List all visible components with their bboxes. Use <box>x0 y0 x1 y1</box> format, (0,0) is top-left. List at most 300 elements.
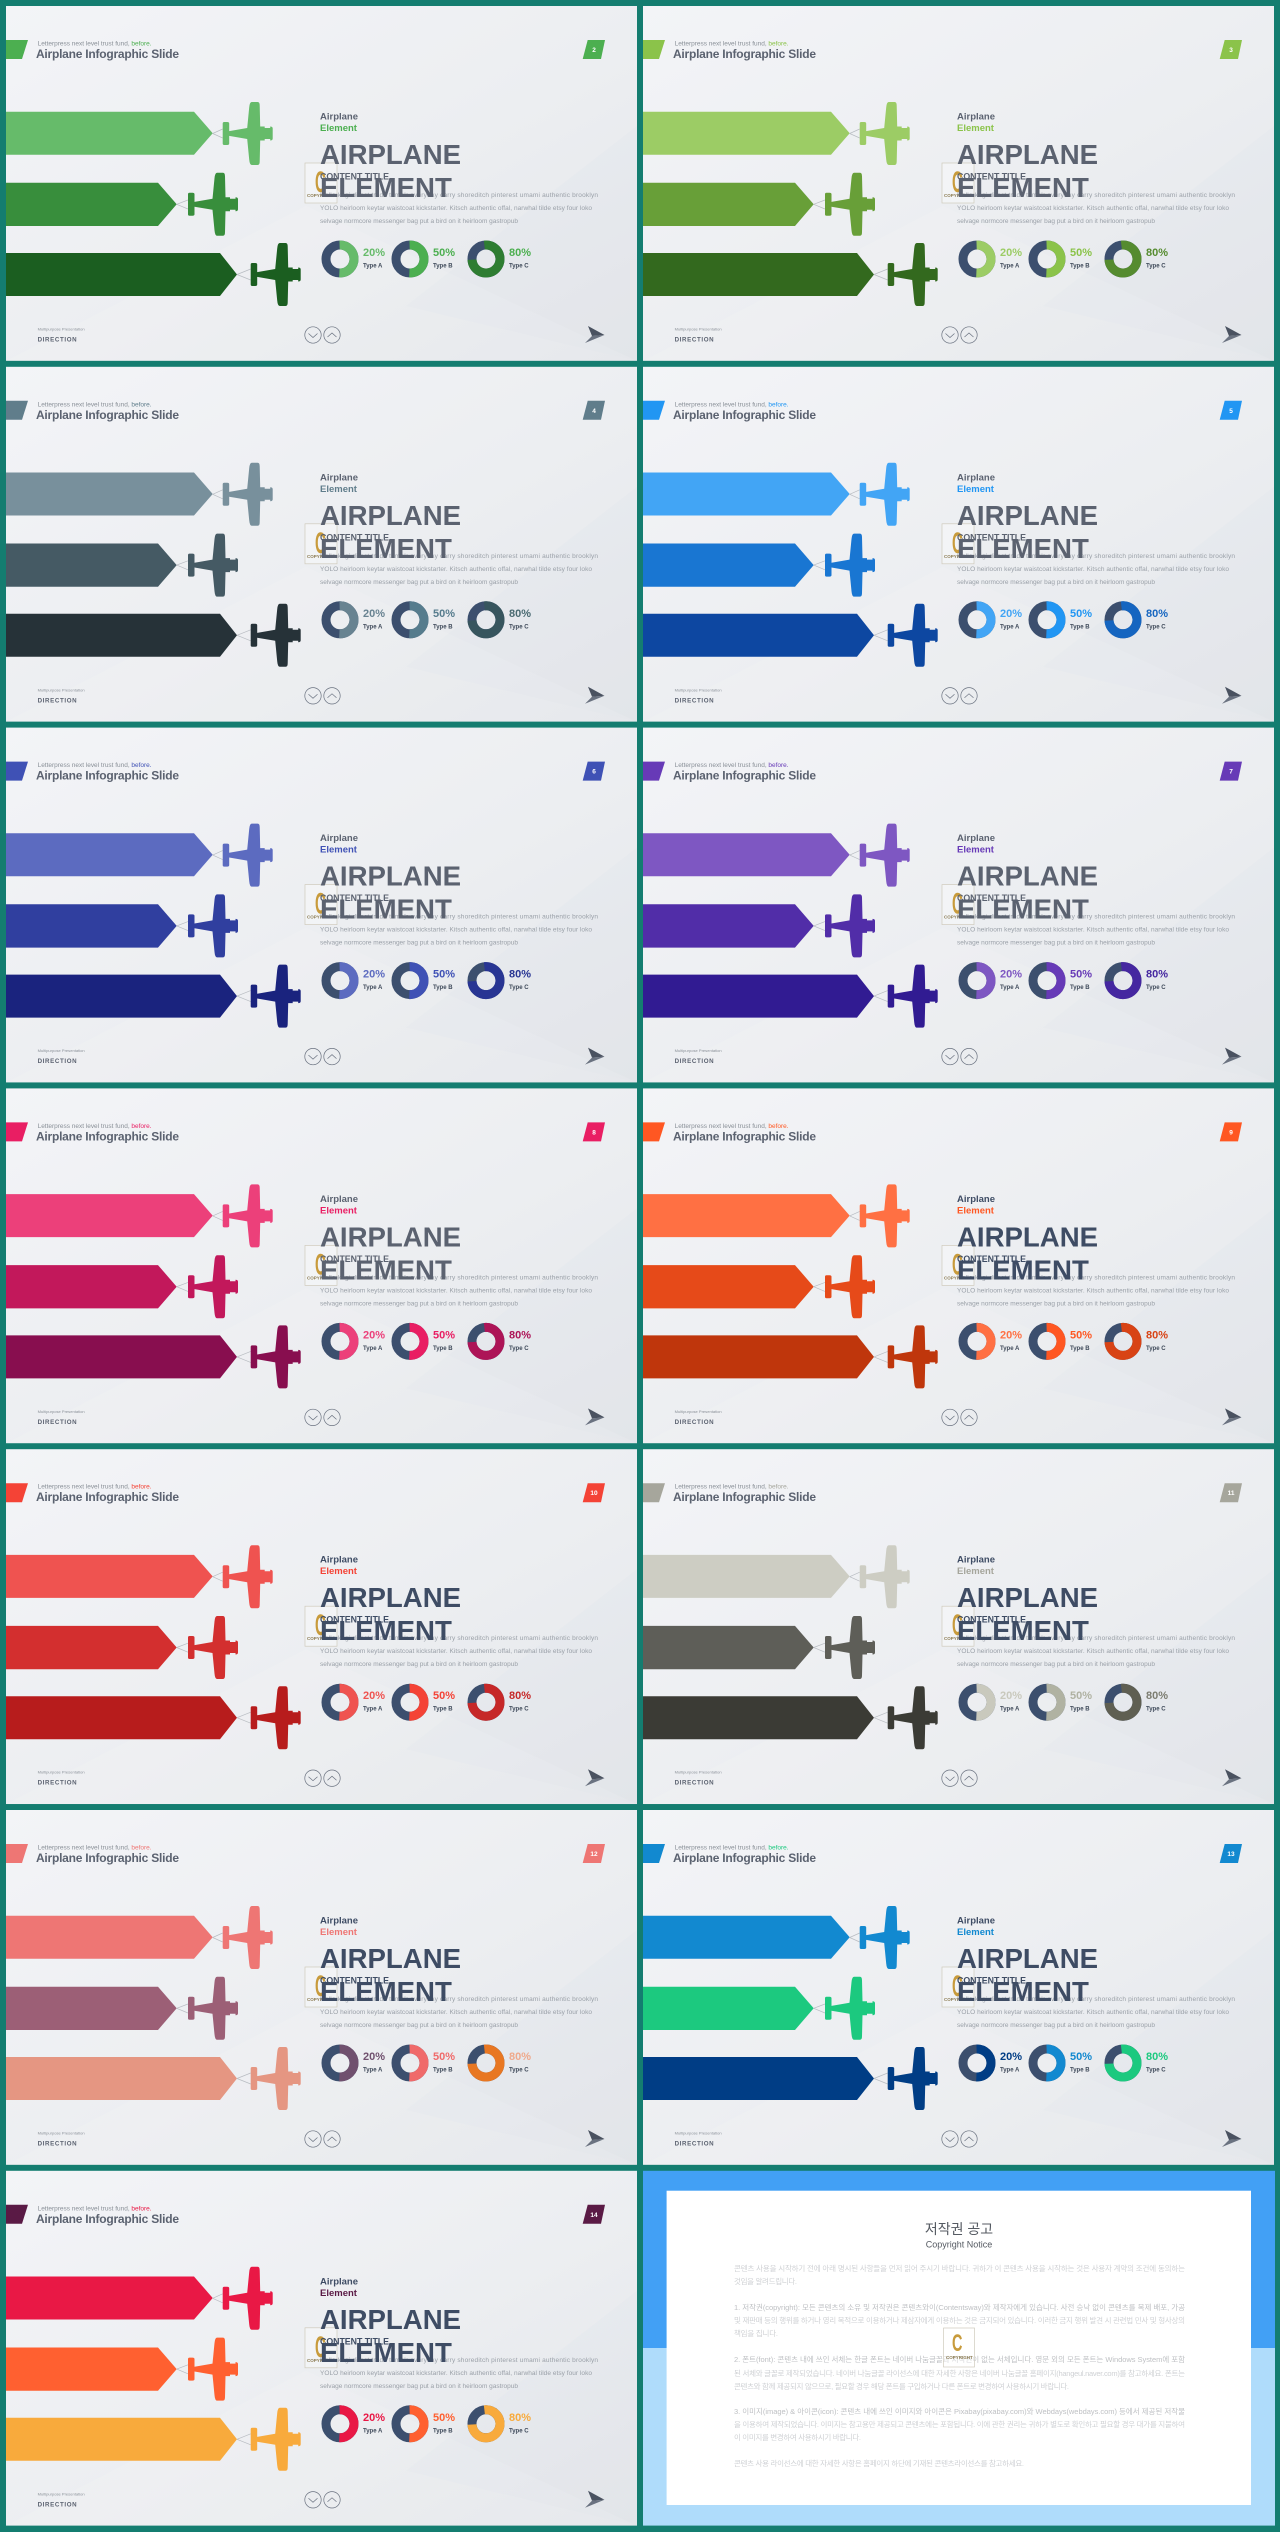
watermark logo: C <box>952 888 963 921</box>
airplane 1 <box>213 824 273 887</box>
body text: YOLO heirloom keytar waistcoat kickstarter. Kitsch authentic offal, narwhal tilde etsy four loko <box>957 566 1229 573</box>
donut type A <box>326 2410 385 2438</box>
header caption: Letterpress next level trust fund, before. <box>38 1123 152 1130</box>
label: airplane element: Airplane <box>957 833 995 844</box>
large heading: AIRPLANE <box>320 1221 461 1252</box>
page number badge <box>1220 401 1242 420</box>
footer text <box>38 1409 85 1426</box>
airplane 3 <box>237 1686 301 1749</box>
label: airplane element: Element <box>320 2288 358 2299</box>
content title: CONTENT TITLE <box>320 172 389 182</box>
notice body text: 것임을 알려드립니다. <box>734 2276 797 2286</box>
body text: selvage normcore messenger bag put a bird on it heirloom gastropub <box>957 1300 1155 1307</box>
arrow bar 3 <box>6 1696 237 1739</box>
page number badge <box>1220 1122 1242 1141</box>
airplane 2 <box>814 1255 875 1318</box>
donut type A <box>326 606 385 634</box>
header title: Airplane Infographic Slide <box>673 1490 816 1504</box>
donut type C: Type C <box>509 624 529 630</box>
navigation arrows <box>942 688 977 704</box>
label: airplane element <box>320 2276 358 2299</box>
large heading <box>320 139 461 203</box>
large heading <box>957 1582 1098 1646</box>
header caption: Letterpress next level trust fund, before. <box>675 401 789 408</box>
page number badge: 14 <box>590 2212 598 2219</box>
footer text: DIRECTION <box>38 1419 77 1426</box>
footer text: Multipurpose Presentation <box>38 326 85 332</box>
notice body text <box>734 2263 1185 2468</box>
page number badge <box>1220 1844 1242 1863</box>
airplane 3 <box>237 604 301 667</box>
arrow bar 2 <box>6 1626 177 1669</box>
arrow bar 3 <box>6 253 237 296</box>
donut type A: 20% <box>1000 247 1022 259</box>
donut type A <box>963 967 1022 995</box>
donut type C: 80% <box>509 2412 531 2424</box>
content title: CONTENT TITLE <box>320 2336 389 2346</box>
slide 14: crimson, orange and amber <box>6 2171 637 2526</box>
airplane 3 <box>874 1686 938 1749</box>
slide 3: light green <box>643 6 1274 361</box>
donut type A: 20% <box>1000 1690 1022 1702</box>
arrow bar 2 <box>6 544 177 587</box>
body text: selvage normcore messenger bag put a bird on it heirloom gastropub <box>957 579 1155 586</box>
donut type B <box>1033 967 1092 995</box>
header caption: Letterpress next level trust fund, before. <box>38 1844 152 1852</box>
watermark logo: COPYRIGHT <box>944 193 971 198</box>
body text <box>320 1996 598 2029</box>
airplane 2 <box>814 1977 875 2040</box>
watermark logo <box>305 885 337 925</box>
header tab <box>643 1483 665 1502</box>
notice title: 저작권 공고 <box>925 2221 993 2237</box>
label: airplane element: Element <box>320 1205 358 1216</box>
arrow bar 2 <box>6 1265 177 1308</box>
donut type A: 20% <box>363 608 385 620</box>
footer text: DIRECTION <box>675 697 714 704</box>
footer text: Multipurpose Presentation <box>38 1409 85 1414</box>
arrow bar 1 <box>6 112 213 155</box>
slide 2: green <box>6 6 637 361</box>
donut type B: 50% <box>433 969 455 981</box>
body text: selvage normcore messenger bag put a bird on it heirloom gastropub <box>957 1661 1155 1668</box>
donut type C: Type C <box>509 1707 529 1713</box>
large heading <box>320 1221 461 1285</box>
donut type A: 20% <box>363 247 385 259</box>
airplane 3 <box>874 1325 938 1388</box>
footer text <box>675 2130 722 2148</box>
notice body text: 책임을 집니다. <box>734 2328 778 2338</box>
donut type B: Type B <box>433 2068 453 2074</box>
donut type C <box>1108 1326 1168 1357</box>
donut type A: Type A <box>363 264 383 270</box>
body text: Hella kogi direct trade tumblr everyday carry shoreditch pinterest umami authentic brooklyn <box>320 1635 598 1642</box>
panel: copyright notice slide <box>643 2171 1275 2526</box>
airplane 3 <box>237 2047 301 2110</box>
arrow bar 1 <box>6 1555 213 1598</box>
donut type B <box>1033 245 1092 273</box>
body text <box>320 553 598 586</box>
body text: selvage normcore messenger bag put a bird on it heirloom gastropub <box>320 579 518 586</box>
footer text <box>675 326 722 344</box>
footer text: Multipurpose Presentation <box>38 1770 85 1775</box>
arrow bar 1 <box>643 833 850 876</box>
arrow bar 2 <box>643 544 814 587</box>
large heading: AIRPLANE <box>320 2304 461 2335</box>
label: airplane element <box>320 1194 358 1216</box>
watermark logo: C <box>952 1971 963 2004</box>
donut type C: 80% <box>509 969 531 981</box>
donut type A <box>326 2049 385 2077</box>
watermark logo: C <box>315 1610 326 1643</box>
footer text <box>675 1770 722 1787</box>
body text <box>957 1274 1235 1307</box>
icon: paper plane <box>1222 1048 1242 1065</box>
watermark logo: C <box>952 2330 962 2357</box>
body text: Hella kogi direct trade tumblr everyday carry shoreditch pinterest umami authentic brooklyn <box>320 2357 598 2364</box>
donut type A: 20% <box>363 1329 385 1341</box>
body text: selvage normcore messenger bag put a bird on it heirloom gastropub <box>320 2022 518 2029</box>
header tab <box>6 401 28 420</box>
large heading: ELEMENT <box>957 172 1089 203</box>
content title: CONTENT TITLE <box>320 893 389 903</box>
content title: CONTENT TITLE <box>957 1254 1026 1264</box>
donut type A: Type A <box>1000 264 1020 270</box>
label: airplane element: Airplane <box>320 112 358 122</box>
donut type C <box>1108 605 1168 635</box>
watermark logo: C <box>315 528 326 560</box>
arrow bar 3 <box>6 2418 237 2461</box>
footer text: DIRECTION <box>38 1780 77 1787</box>
arrow bar 3 <box>6 614 237 657</box>
large heading <box>957 1221 1098 1285</box>
watermark logo <box>305 1606 337 1646</box>
airplane 2 <box>814 894 875 957</box>
body text: selvage normcore messenger bag put a bird on it heirloom gastropub <box>320 2383 518 2390</box>
airplane 3 <box>874 965 938 1028</box>
airplane 2 <box>177 1255 238 1318</box>
large heading: ELEMENT <box>320 172 452 203</box>
slide background <box>643 728 1274 1083</box>
navigation arrows <box>942 327 977 343</box>
donut type A <box>963 606 1022 634</box>
page number badge: 9 <box>1229 1129 1233 1136</box>
watermark logo: C <box>315 1249 326 1282</box>
label: airplane element <box>957 1916 995 1938</box>
large heading <box>957 861 1098 925</box>
airplane 3 <box>237 965 301 1028</box>
donut type B: Type B <box>433 624 453 630</box>
donut type A: 20% <box>1000 608 1022 620</box>
body text: Hella kogi direct trade tumblr everyday carry shoreditch pinterest umami authentic brooklyn <box>957 1274 1235 1281</box>
label: airplane element: Airplane <box>957 472 995 483</box>
donut type C: Type C <box>1146 624 1166 630</box>
donut type B: 50% <box>1070 969 1092 981</box>
large heading: AIRPLANE <box>320 1582 461 1613</box>
footer text <box>675 1048 722 1065</box>
watermark logo: C <box>315 888 326 921</box>
icon: paper plane <box>585 1408 604 1425</box>
header caption: Letterpress next level trust fund, before. <box>38 762 152 769</box>
icon: paper plane <box>1222 1769 1242 1786</box>
donut type A: Type A <box>363 2428 383 2434</box>
donut type C: Type C <box>1146 264 1166 270</box>
slide background <box>6 1449 637 1804</box>
footer text: Multipurpose Presentation <box>675 2130 722 2136</box>
donut type C <box>1108 2048 1168 2078</box>
body text: Hella kogi direct trade tumblr everyday carry shoreditch pinterest umami authentic brooklyn <box>320 553 598 560</box>
header title: Airplane Infographic Slide <box>36 2212 179 2226</box>
slide background <box>643 1088 1274 1443</box>
body text <box>957 553 1235 586</box>
large heading: AIRPLANE <box>957 1943 1098 1974</box>
donut type B: 50% <box>1070 1329 1092 1341</box>
donut type B: 50% <box>433 2051 455 2063</box>
page number badge: 6 <box>592 769 596 776</box>
header tab <box>6 2205 28 2224</box>
body text: selvage normcore messenger bag put a bird on it heirloom gastropub <box>957 218 1155 225</box>
donut type A <box>326 1327 385 1355</box>
donut type C <box>471 2048 531 2078</box>
body text: selvage normcore messenger bag put a bird on it heirloom gastropub <box>320 1661 518 1668</box>
header tab <box>6 1844 28 1863</box>
page number badge: 12 <box>590 1851 598 1858</box>
slide 10: red <box>6 1449 637 1804</box>
header caption: Letterpress next level trust fund, before. <box>675 762 789 769</box>
large heading: ELEMENT <box>957 1615 1089 1646</box>
donut type A <box>326 967 385 995</box>
body text <box>957 1635 1235 1668</box>
label: airplane element <box>320 472 358 495</box>
navigation arrows <box>942 1770 977 1786</box>
content title: CONTENT TITLE <box>957 1976 1026 1986</box>
content title: CONTENT TITLE <box>320 1254 389 1264</box>
airplane 2 <box>177 534 238 597</box>
label: airplane element: Element <box>957 123 995 134</box>
label: airplane element: Element <box>320 1927 358 1938</box>
donut type B: 50% <box>1070 2051 1092 2063</box>
slide background <box>643 1810 1274 2165</box>
notice body text: 을 이용하여 제작되었습니다. 이미지는 참고용만 제공되고 콘텐츠에는 포함됩니다. 이에 관한 권리는 귀하가 별도로 확인하고 필요할 경우 대가를 지불하여 <box>734 2419 1185 2429</box>
label: airplane element: Element <box>320 123 358 134</box>
large heading: ELEMENT <box>320 1615 452 1646</box>
arrow bar 2 <box>6 183 177 226</box>
arrow bar 2 <box>6 2348 177 2391</box>
watermark logo <box>942 524 974 564</box>
footer text: Multipurpose Presentation <box>38 1048 85 1053</box>
navigation arrows <box>305 327 340 343</box>
watermark logo <box>942 1245 974 1285</box>
header tab <box>643 1844 665 1863</box>
body text <box>957 192 1235 225</box>
donut type C <box>1108 965 1168 996</box>
donut type C: 80% <box>1146 969 1168 981</box>
donut type A: 20% <box>363 969 385 981</box>
notice body text: 이 이미지를 변경하여 사용하시기 바랍니다. <box>734 2432 861 2442</box>
body text: YOLO heirloom keytar waistcoat kickstarter. Kitsch authentic offal, narwhal tilde etsy four loko <box>320 205 592 212</box>
header caption: Letterpress next level trust fund, before. <box>675 1844 789 1852</box>
donut type B <box>1033 606 1092 634</box>
donut type C <box>471 965 531 996</box>
slide background <box>6 2171 637 2526</box>
donut type A <box>963 1327 1022 1355</box>
page number badge <box>1220 1483 1242 1502</box>
donut type C <box>471 1326 531 1357</box>
watermark logo: COPYRIGHT <box>307 915 334 920</box>
large heading <box>320 1582 461 1646</box>
donut type B: 50% <box>433 1690 455 1702</box>
watermark logo <box>305 1967 337 2007</box>
donut type C: 80% <box>509 2051 531 2063</box>
label: airplane element <box>957 1555 995 1577</box>
header caption: Letterpress next level trust fund, before. <box>675 1484 789 1491</box>
page number badge <box>583 1122 605 1141</box>
icon: paper plane <box>1222 326 1242 343</box>
slide background <box>643 367 1274 722</box>
airplane 2 <box>814 1616 875 1679</box>
donut type A: 20% <box>1000 1329 1022 1341</box>
donut type C: Type C <box>509 264 529 270</box>
donut type C: Type C <box>1146 1707 1166 1713</box>
navigation arrows <box>942 2131 977 2147</box>
donut type B <box>1033 1688 1092 1716</box>
body text: Hella kogi direct trade tumblr everyday carry shoreditch pinterest umami authentic brooklyn <box>320 1996 598 2003</box>
airplane 1 <box>850 463 910 526</box>
header caption: Letterpress next level trust fund, before. <box>38 1484 152 1491</box>
donut type C <box>471 2409 531 2439</box>
donut type A <box>963 1688 1022 1716</box>
watermark logo: C <box>952 1610 963 1643</box>
watermark logo <box>305 163 337 203</box>
body text: Hella kogi direct trade tumblr everyday carry shoreditch pinterest umami authentic brooklyn <box>320 192 598 199</box>
large heading <box>320 500 461 564</box>
body text: Hella kogi direct trade tumblr everyday carry shoreditch pinterest umami authentic brooklyn <box>957 914 1235 921</box>
icon: paper plane <box>585 2130 604 2147</box>
notice body text: 된 서체와 글꼴로 제작되었습니다. 네이버 나눔글꼴 라이선스에 대한 자세한 사항은 네이버 나눔글꼴 홈페이지(hangeul.naver.com)를 참고하세요. 폰트는 <box>734 2368 1185 2378</box>
large heading <box>320 861 461 925</box>
body text <box>320 2357 598 2390</box>
arrow bar 2 <box>643 1265 814 1308</box>
donut type C <box>471 605 531 635</box>
slide background <box>643 1449 1274 1804</box>
header tab <box>6 762 28 781</box>
airplane 1 <box>850 102 910 165</box>
arrow bar 1 <box>6 2276 213 2320</box>
arrow bar 3 <box>643 975 874 1018</box>
footer text <box>38 1048 85 1065</box>
content title: CONTENT TITLE <box>957 172 1026 182</box>
label: airplane element: Airplane <box>957 1555 995 1566</box>
donut type C <box>1108 244 1168 274</box>
label: airplane element <box>957 833 995 856</box>
body text <box>957 1996 1235 2029</box>
slide 4: blue grey <box>6 367 637 722</box>
footer text: Multipurpose Presentation <box>38 2491 85 2496</box>
arrow bar 2 <box>6 1987 177 2030</box>
large heading: ELEMENT <box>320 2337 452 2368</box>
airplane 1 <box>213 2267 273 2330</box>
slide 12: coral <box>6 1810 637 2165</box>
page number badge <box>583 1483 605 1502</box>
arrow bar 3 <box>6 2057 237 2100</box>
donut type B: Type B <box>1070 985 1090 991</box>
notice body text: 콘텐츠 사용을 시작하기 전에 아래 명시된 사항들을 먼저 읽어 주시기 바랍니다. 귀하가 이 콘텐츠 사용을 시작하는 것은 사용자 계약의 조건에 동의하는 <box>734 2263 1185 2273</box>
header tab <box>6 1122 28 1141</box>
donut type A: Type A <box>363 1346 383 1352</box>
large heading: AIRPLANE <box>957 139 1098 170</box>
footer text: DIRECTION <box>38 2140 77 2148</box>
page number badge <box>1220 762 1242 781</box>
slide 7: deep purple <box>643 728 1274 1083</box>
body text: Hella kogi direct trade tumblr everyday carry shoreditch pinterest umami authentic brooklyn <box>320 1274 598 1281</box>
content title: CONTENT TITLE <box>957 893 1026 903</box>
header tab <box>643 401 665 420</box>
body text: selvage normcore messenger bag put a bird on it heirloom gastropub <box>320 940 518 947</box>
icon: paper plane <box>585 2491 604 2508</box>
watermark logo: C <box>315 1971 326 2004</box>
notice title: Copyright Notice <box>926 2240 992 2250</box>
header title: Airplane Infographic Slide <box>36 1851 179 1865</box>
body text <box>320 1635 598 1668</box>
footer text: Multipurpose Presentation <box>675 687 722 692</box>
airplane 3 <box>874 2047 938 2110</box>
arrow bar 3 <box>643 253 874 296</box>
header title: Airplane Infographic Slide <box>36 408 179 422</box>
airplane 3 <box>237 243 301 306</box>
navigation arrows <box>305 2131 340 2147</box>
donut type A: 20% <box>1000 2051 1022 2063</box>
donut type C: 80% <box>1146 2051 1168 2063</box>
body text: YOLO heirloom keytar waistcoat kickstarter. Kitsch authentic offal, narwhal tilde etsy four loko <box>320 1287 592 1294</box>
header title: Airplane Infographic Slide <box>673 408 816 422</box>
label: airplane element: Element <box>320 1566 358 1577</box>
page number badge <box>583 40 605 59</box>
header title: Airplane Infographic Slide <box>36 1490 179 1504</box>
airplane 2 <box>177 1616 238 1679</box>
watermark logo: COPYRIGHT <box>946 2355 973 2360</box>
donut type A: Type A <box>1000 1707 1020 1713</box>
icon: paper plane <box>585 1769 604 1786</box>
header title: Airplane Infographic Slide <box>36 769 179 783</box>
watermark logo <box>942 885 974 925</box>
white notice card <box>667 2191 1251 2505</box>
footer text: DIRECTION <box>675 1419 714 1426</box>
large heading: ELEMENT <box>320 1976 452 2007</box>
donut type A: 20% <box>363 2412 385 2424</box>
airplane 1 <box>213 1906 273 1969</box>
footer text: DIRECTION <box>38 697 77 704</box>
donut type B: Type B <box>1070 2068 1090 2074</box>
footer text <box>38 1770 85 1787</box>
airplane 1 <box>213 102 273 165</box>
body text: YOLO heirloom keytar waistcoat kickstarter. Kitsch authentic offal, narwhal tilde etsy four loko <box>320 566 592 573</box>
donut type A <box>326 245 385 273</box>
airplane 2 <box>814 173 875 236</box>
header tab <box>643 40 665 59</box>
watermark logo: COPYRIGHT <box>307 193 334 198</box>
donut type C: Type C <box>509 985 529 991</box>
body text <box>320 1274 598 1307</box>
arrow bar 1 <box>6 472 213 516</box>
header title: Airplane Infographic Slide <box>673 1129 816 1143</box>
donut type C: Type C <box>509 2068 529 2074</box>
footer text <box>38 326 85 344</box>
body text: selvage normcore messenger bag put a bird on it heirloom gastropub <box>957 2022 1155 2029</box>
watermark logo: COPYRIGHT <box>944 915 971 920</box>
footer text: Multipurpose Presentation <box>675 1409 722 1414</box>
donut type B: 50% <box>433 608 455 620</box>
large heading <box>957 139 1098 203</box>
